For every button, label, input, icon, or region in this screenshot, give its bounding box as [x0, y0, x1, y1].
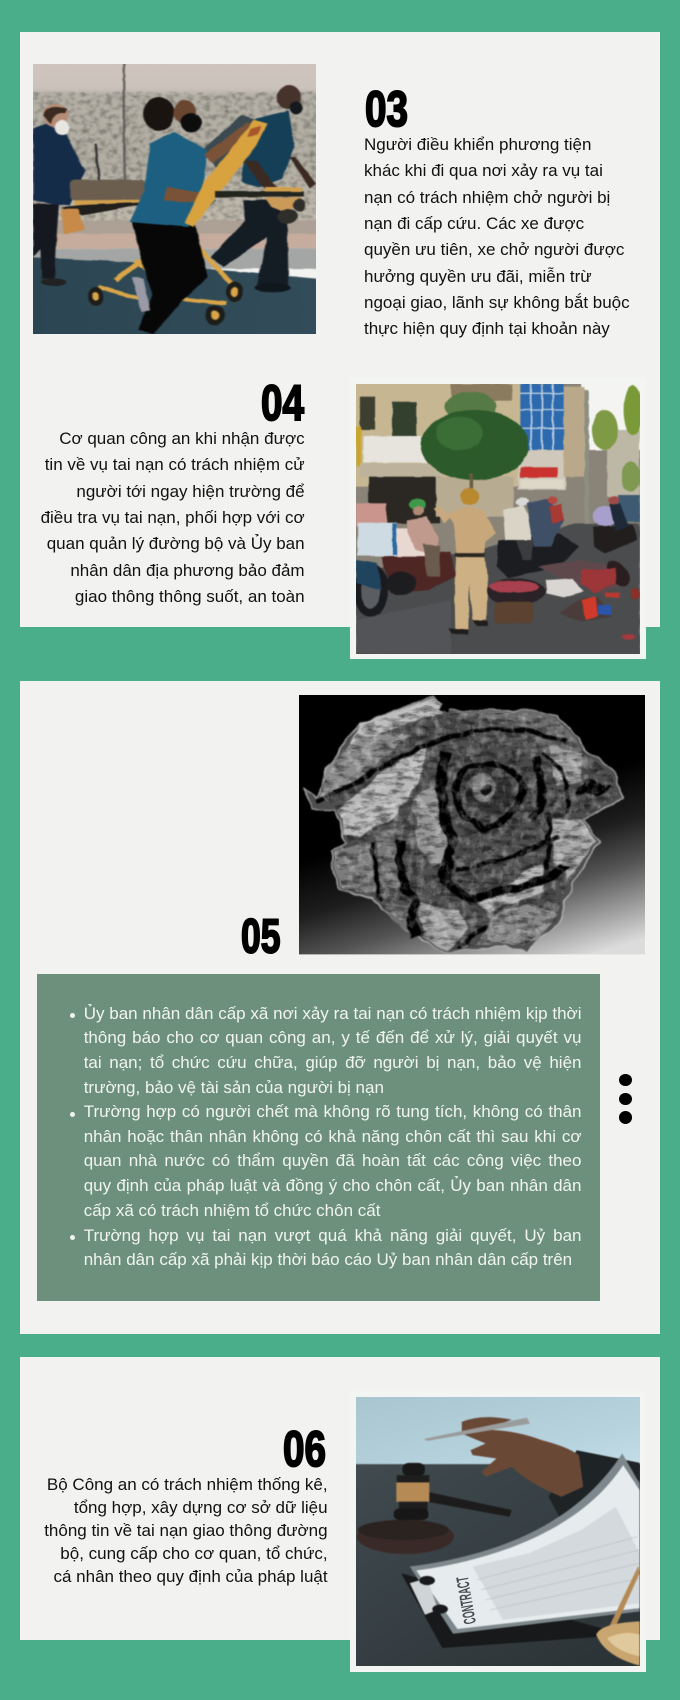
- photo frame: traffic accident street scene: [350, 378, 646, 659]
- photo frame: gavel and contract: [350, 1391, 646, 1672]
- clip: [410, 1578, 438, 1614]
- bullet 1: [70, 1004, 581, 1097]
- text: section 04: quan quản lý đường bộ và Ủy ban: [47, 534, 305, 553]
- bullet 1: tai nạn; tổ chức cứu chữa, giúp đỡ người bị nạn, bảo vệ hiện: [84, 1053, 581, 1072]
- text: section 04: tin về vụ tai nạn có trách nhiệm cử: [45, 455, 305, 474]
- text: section 06: tổng hợp, xây dựng cơ sở dữ liệu: [74, 1498, 328, 1517]
- bullet 1: thông báo cho cơ quan công an, y tế đến để xử lý, giải quyết vụ: [84, 1028, 581, 1047]
- gavel base: [357, 1519, 454, 1554]
- bag behind: [204, 115, 264, 170]
- bullet 1: Ủy ban nhân dân cấp xã nơi xảy ra tai nạn có trách nhiệm kịp thời: [84, 1004, 581, 1023]
- text: section 03: ngoại giao, lãnh sự không bắt buộc: [364, 293, 630, 312]
- woman: [131, 222, 207, 334]
- text: section 03: [364, 135, 630, 338]
- right man: [210, 199, 288, 289]
- officer: [434, 507, 451, 523]
- text: section 04: nhân dân địa phương bảo đảm: [70, 561, 305, 580]
- number 04: 04: [261, 375, 304, 431]
- text: section 03: nạn đi cấp cứu. Các xe được: [364, 214, 584, 233]
- photo: dried black and white rose: [299, 695, 645, 954]
- text: section 06: Bộ Công an có trách nhiệm thống kê,: [47, 1475, 328, 1494]
- bullet 3: nhân dân cấp xã phải kịp thời báo cáo Uỷ ban nhân dân cấp trên: [84, 1250, 572, 1269]
- clipboard: [401, 1573, 607, 1648]
- label on the contract: CONTRACT: [453, 1574, 480, 1625]
- gavel head: [402, 1463, 425, 1476]
- icon: three vertical dots: [619, 1074, 632, 1124]
- text: section 04: người tới ngay hiện trường để: [76, 482, 305, 501]
- bullet 3: [70, 1226, 581, 1269]
- left man: [32, 204, 59, 279]
- text: section 03: Người điều khiển phương tiện: [364, 135, 591, 154]
- bullet 1: trường, bảo vệ tài sản của người bị nạn: [84, 1078, 384, 1097]
- contract sheet: [410, 1453, 640, 1633]
- bullet 2: [70, 1102, 582, 1220]
- front stretcher rail: [215, 191, 303, 198]
- bullet 2: Trường hợp có người chết mà không rõ tung tích, không có thân: [84, 1102, 581, 1121]
- bullet 2: nhân hoặc thân nhân không có khả năng chôn cất thì sau khi cơ: [84, 1127, 581, 1146]
- bullet 2: quy định của pháp luật và đồng ý cho chôn cất, Ủy ban nhân dân: [84, 1176, 581, 1195]
- scales: [609, 1566, 640, 1626]
- panel: section 05: [20, 681, 660, 1334]
- right group: [496, 533, 579, 578]
- left crowd: [356, 503, 386, 527]
- number 05: 05: [241, 910, 280, 963]
- panel: sections 03 and 04: [20, 32, 660, 627]
- text: section 03: khác khi đi qua nơi xảy ra vụ tai: [364, 161, 603, 180]
- gavel handle: [427, 1491, 512, 1516]
- number 06: 06: [283, 1421, 326, 1477]
- text: section 03: nạn có trách nhiệm chở người bị: [364, 188, 610, 207]
- photo: gavel, hand with pen and contract: [356, 1397, 640, 1666]
- text: section 06: thông tin về tai nạn giao thông đường: [44, 1521, 328, 1540]
- panel: section 06: [20, 1357, 660, 1640]
- text: section 06: cá nhân theo quy định của pháp luật: [53, 1567, 328, 1586]
- text: section 04: giao thông thông suốt, an toàn: [75, 587, 305, 606]
- photo: paramedics running with stretcher: [33, 64, 316, 334]
- number 03: 03: [365, 81, 408, 137]
- bullet 2: quan nhà nước có thẩm quyền đã hoàn tất các công việc theo: [84, 1151, 581, 1170]
- text: section 04: [41, 429, 305, 606]
- bullet 3: Trường hợp vụ tai nạn vượt quá khả năng giải quyết, Uỷ ban: [84, 1226, 581, 1244]
- text: section 06: bộ, cung cấp cho cơ quan, tổ chức,: [60, 1544, 328, 1563]
- text: section 03: hưởng quyền ưu đãi, miễn trừ: [364, 267, 592, 286]
- text: section 04: Cơ quan công an khi nhận được: [59, 429, 305, 448]
- text: section 03: quyền ưu tiên, xe chở người được: [364, 240, 624, 259]
- fallen motorbikes: [538, 560, 629, 593]
- green text box with bullet list: [37, 974, 600, 1301]
- far right bike: [618, 495, 640, 522]
- wheels and yellow base: [98, 247, 234, 304]
- bullet 2: cấp xã có trách nhiệm tổ chức chôn cất: [84, 1201, 380, 1220]
- text: section 04: điều tra vụ tai nạn, phối hợp với cơ: [41, 508, 305, 527]
- yellow upright: [184, 120, 267, 227]
- text: section 06: [44, 1475, 328, 1586]
- rose base: [303, 697, 623, 954]
- stretcher back: [94, 144, 101, 200]
- text: section 03: thực hiện quy định tại khoản này: [364, 319, 610, 338]
- photo: traffic officer at accident: [356, 384, 640, 654]
